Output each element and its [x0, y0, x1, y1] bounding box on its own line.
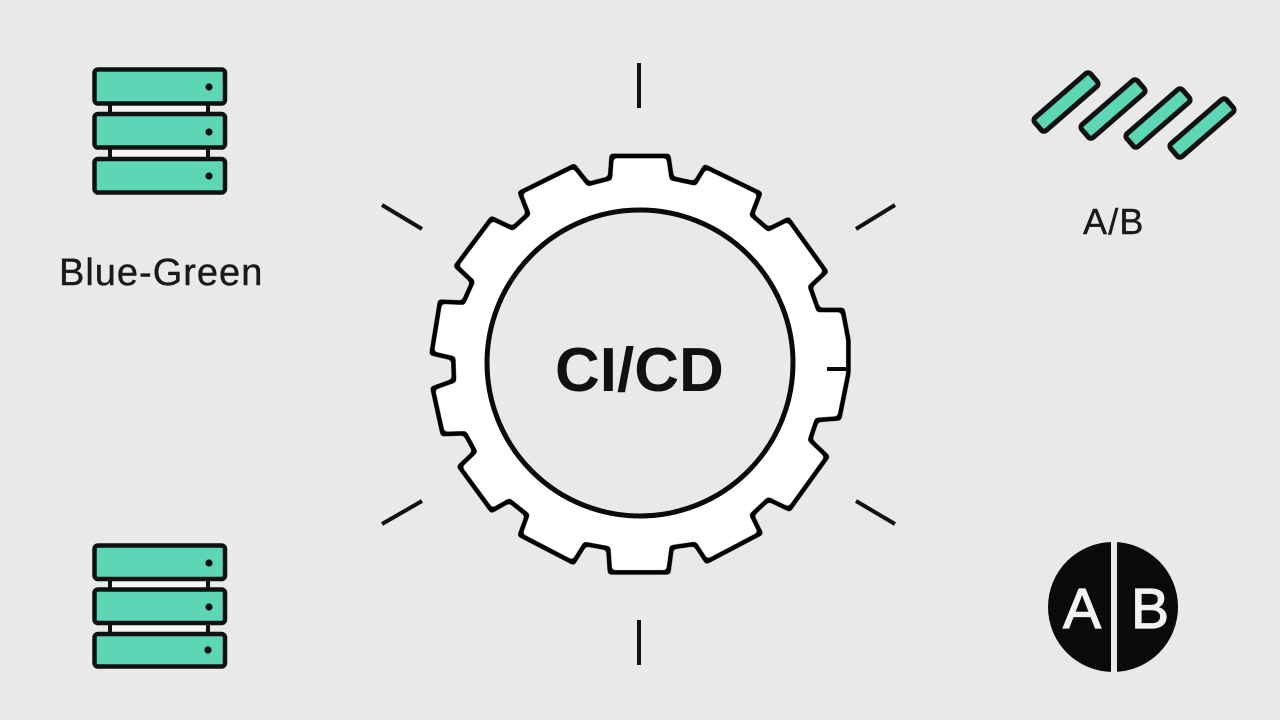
icon: blue-green server stack, top [94, 70, 225, 192]
Blue-Green label: Blue-Green [59, 252, 263, 294]
gear inner circle [487, 210, 793, 516]
icon: server stack, bottom [94, 546, 225, 666]
CI/CD label: CI/CD [555, 336, 724, 405]
icon: A B split circle: A [1063, 577, 1101, 641]
icon: A B split circle: B [1131, 577, 1169, 641]
gear outline [432, 156, 848, 572]
icon: A B split circle [1048, 540, 1178, 674]
radiating tick marks [382, 63, 895, 665]
A/B label: A/B [1083, 201, 1145, 242]
icon: A/B diagonal bars [1032, 71, 1236, 159]
gear right notch mark [827, 367, 848, 371]
central CI/CD gear [432, 156, 848, 572]
